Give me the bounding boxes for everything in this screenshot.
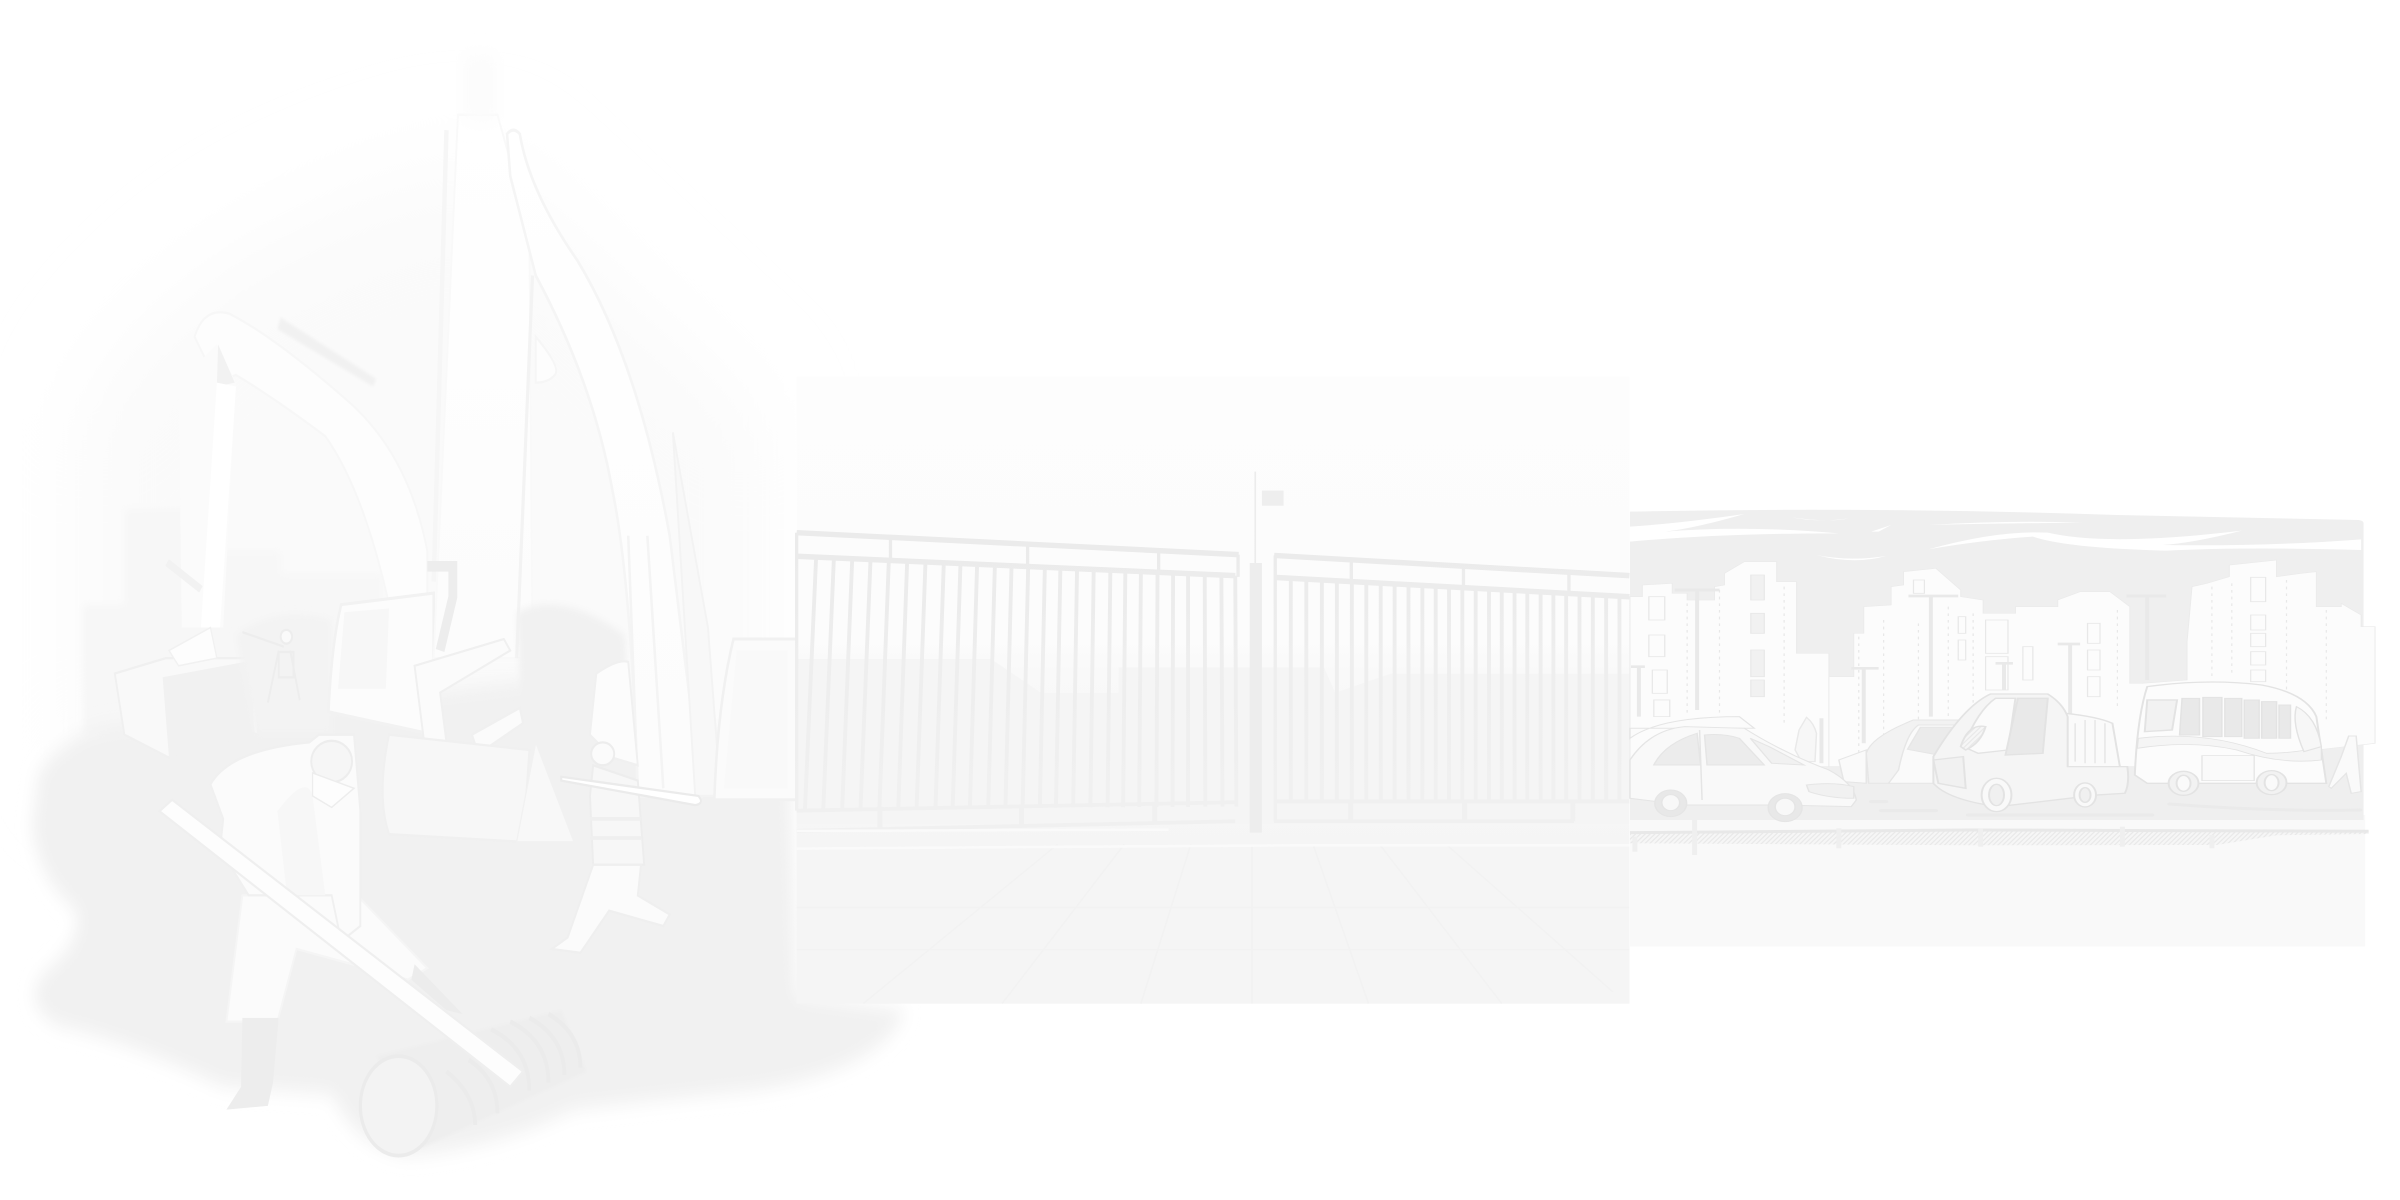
ground shadow: [32, 673, 906, 1156]
illustration: city street: [1630, 510, 2375, 947]
clouds: [1630, 514, 2361, 560]
pedestrian right: [2329, 736, 2361, 793]
illustration: construction site: [32, 54, 906, 1156]
excavator bucket: [115, 562, 268, 758]
photo background: [797, 377, 1629, 1004]
flagpole and flag: [1255, 472, 1284, 566]
left gate: [797, 533, 1239, 831]
pedestrian behind car: [1795, 717, 1816, 762]
distant buildings: [83, 509, 383, 735]
skyline buildings: [1630, 560, 2375, 767]
road markings: [1871, 802, 2360, 815]
car left: [1630, 717, 1856, 822]
gate post: [1250, 563, 1262, 833]
right gate: [1274, 555, 1629, 821]
background haze: [77, 168, 765, 765]
truck: [1933, 694, 2128, 812]
curb lines: [797, 830, 1629, 849]
building windows: [1649, 575, 2326, 757]
minibus: [2135, 682, 2326, 795]
drain pipe coil: [360, 1010, 587, 1156]
street lamps: [1631, 590, 2166, 763]
curb with hatching: [1630, 817, 2369, 855]
excavator left boom: [179, 312, 427, 628]
sky panel: [1630, 510, 2364, 820]
excavator cab: [328, 593, 434, 735]
tall excavator arm: [427, 54, 533, 658]
distant hills: [797, 659, 1629, 823]
distant worker: [242, 630, 300, 703]
rock pile: [236, 615, 332, 735]
street scene lower panel: [1630, 815, 2365, 947]
excavator hydraulic arms: [383, 639, 529, 842]
worker carrying pipe: [517, 661, 701, 953]
large excavator boom: [507, 130, 721, 796]
second cab: [714, 639, 797, 800]
photo: fenced gate: [797, 377, 1629, 1004]
dark mound behind: [517, 605, 628, 727]
paved ground: [797, 836, 1629, 1004]
foreground worker with plank: [159, 735, 523, 1110]
parked van behind: [1839, 720, 1963, 783]
